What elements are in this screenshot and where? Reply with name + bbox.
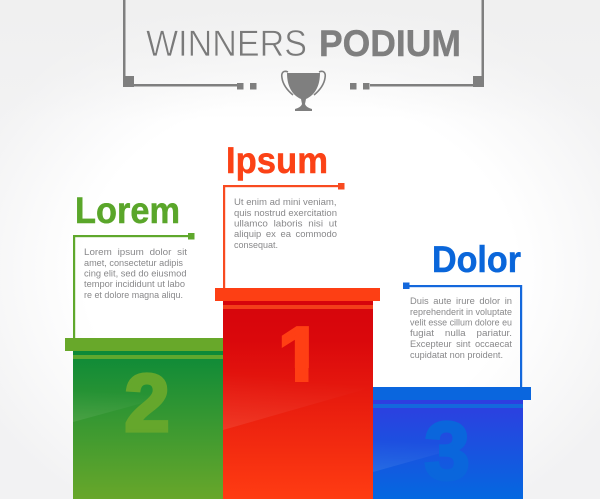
text block: Dolor: Duis aute irure dolor in: [410, 296, 512, 307]
text block: Lorem: amet, consectetur adipis: [84, 258, 183, 269]
callout line: Lorem: [73, 233, 194, 339]
text block: Lorem: re et dolore magna aliqu.: [84, 290, 183, 301]
text block: Dolor: velit esse cillum dolore eu: [410, 318, 512, 328]
callout line: Dolor: [403, 282, 522, 388]
number: 2: 2: [124, 358, 170, 449]
heading: Dolor: Dolor: [432, 239, 521, 280]
text block: Lorem: tempor incididunt ut labo: [84, 279, 185, 290]
header frame: [123, 0, 484, 90]
text block: Ipsum: Ut enim ad mini veniam,: [234, 197, 336, 208]
panel: Ipsum (1st place): [215, 140, 380, 499]
text block: Dolor: Excepteur sint occaecat: [410, 339, 512, 350]
podium: red: [215, 288, 380, 499]
text block: Ipsum: consequat.: [234, 240, 278, 251]
callout line: Ipsum: [223, 183, 344, 289]
podium: green: [65, 338, 223, 499]
panel: Lorem (2nd place): [65, 190, 223, 499]
text block: Lorem: cing elit, sed do eiusmod: [84, 268, 186, 280]
text block: Dolor: cupidatat non proident.: [410, 350, 503, 361]
text block: Lorem: Lorem ipsum dolor sit: [84, 247, 187, 258]
heading: Ipsum: Ipsum: [226, 140, 328, 181]
text block: Ipsum: aliquip ex ea commodo: [234, 229, 337, 240]
title: WINNERS: [146, 23, 307, 64]
number: 3: 3: [424, 406, 470, 497]
title: PODIUM: [319, 23, 461, 64]
panel: Dolor (3rd place): [373, 239, 531, 499]
text block: Ipsum: ullamco laboris nisi ut: [234, 218, 337, 230]
text block: Dolor: reprehenderit in voluptate: [410, 307, 512, 318]
number: 1: 1: [278, 310, 322, 399]
podium: blue: [373, 387, 531, 499]
text block: Ipsum: quis nostrud exercitation: [234, 208, 337, 219]
title: [146, 23, 461, 64]
text block: Ipsum: [234, 197, 337, 251]
text block: Dolor: [410, 296, 512, 361]
heading: Lorem: Lorem: [75, 190, 180, 231]
icon: trophy: [282, 71, 325, 111]
text block: Dolor: fugiat nulla pariatur.: [410, 328, 512, 339]
text block: Lorem: [84, 247, 187, 301]
